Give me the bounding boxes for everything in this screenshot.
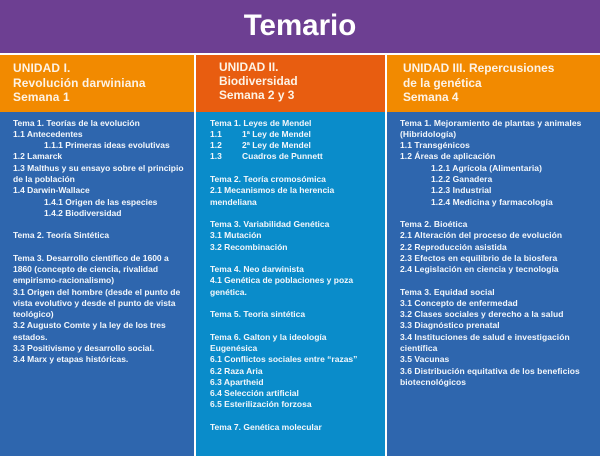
text: unidad II temario: 3.1 Mutación [210, 230, 261, 240]
text: unidad III temario: 1.2.2 Ganadera [431, 174, 492, 184]
text: unidad II temario: Tema 7. Genética molecular [210, 422, 322, 432]
text: unidad II temario: Tema 1. Leyes de Mendel [210, 118, 311, 128]
heading: unidad III [403, 61, 554, 104]
heading: unidad I [13, 61, 146, 104]
text: unidad II temario: 4.1 Genética de poblaciones y poza [210, 275, 353, 285]
text: unidad II temario: 2.1 Mecanismos de la herencia [210, 185, 334, 195]
text: unidad II temario: Tema 2. Teoría cromosómica [210, 174, 326, 184]
text: unidad I temario: 3.1 Origen del hombre (desde el punto de [13, 287, 180, 297]
text: unidad I temario: 3.4 Marx y etapas históricas. [13, 354, 128, 364]
text: unidad III temario: 2.4 Legislación en ciencia y tecnología [400, 264, 559, 274]
heading: unidad I: Semana 1 [13, 90, 70, 104]
text: unidad II temario: mendeliana [210, 197, 257, 207]
text: unidad I temario: empirismo-racionalismo) [13, 275, 114, 285]
text: unidad III temario: 3.5 Vacunas [400, 354, 449, 364]
heading: unidad I: UNIDAD I. [13, 61, 70, 75]
text: unidad III temario: 2.1 Alteración del proceso de evolución [400, 230, 562, 240]
text: unidad I temario: 1.1.1 Primeras ideas evolutivas [44, 140, 170, 150]
text: unidad I temario: Tema 3. Desarrollo científico de 1600 a [13, 253, 169, 263]
text: unidad III temario: 1.2.1 Agrícola (Alimentaria) [431, 163, 542, 173]
text: unidad III temario: Tema 2. Bioética [400, 219, 467, 229]
panel: unidad II header [196, 55, 385, 112]
text: unidad II temario: Tema 6. Galton y la ideología [210, 332, 327, 342]
text: unidad II temario: Eugenésica [210, 343, 257, 353]
text: unidad III temario: 3.1 Concepto de enfermedad [400, 298, 518, 308]
text: unidad III temario: 3.2 Clases sociales y derecho a la salud [400, 309, 564, 319]
heading: unidad III: UNIDAD III. Repercusiones [403, 61, 554, 75]
text: unidad II temario: 6.3 Apartheid [210, 377, 264, 387]
text: unidad III temario: 1.2.4 Medicina y farmacología [431, 197, 553, 207]
heading: unidad II: Semana 2 y 3 [219, 88, 294, 102]
text: unidad II temario: Tema 3. Variabilidad Genética [210, 219, 329, 229]
text: unidad I temario: 3.3 Positivismo y desarrollo social. [13, 343, 154, 353]
panel: unidad III contents [387, 112, 600, 456]
title banner [0, 0, 600, 53]
text: unidad I temario: Tema 2. Teoría Sintética [13, 230, 109, 240]
text: unidad III temario: (Hibridología) [400, 129, 456, 139]
text: unidad I temario: vista evolutivo y desde el punto de vista [13, 298, 176, 308]
text: unidad III temario: 3.6 Distribución equitativa de los beneficios [400, 366, 580, 376]
text: unidad II temario: 1.1 [210, 129, 222, 139]
panel: unidad I contents [0, 112, 194, 456]
text: unidad I temario: 1.4 Darwin-Wallace [13, 185, 90, 195]
text: unidad III temario: biotecnológicos [400, 377, 466, 387]
text: unidad I temario: 1.3 Malthus y su ensayo sobre el principio [13, 163, 184, 173]
text: unidad II temario: 6.2 Raza Aria [210, 366, 263, 376]
text: unidad III temario: 2.2 Reproducción asistida [400, 242, 507, 252]
text: unidad II temario: 6.4 Selección artificial [210, 388, 299, 398]
heading: unidad II: UNIDAD II. [219, 60, 278, 74]
text: unidad II temario: 1.3 [210, 151, 222, 161]
text: unidad II temario: 1ª Ley de Mendel [242, 129, 311, 139]
text: unidad II temario: 2ª Ley de Mendel [242, 140, 311, 150]
text: unidad III temario: Tema 1. Mejoramiento de plantas y animales [400, 118, 581, 128]
text: unidad II temario: Tema 4. Neo darwinista [210, 264, 304, 274]
text: unidad I temario: 1.4.1 Origen de las especies [44, 197, 157, 207]
text: unidad II temario: Tema 5. Teoría sintética [210, 309, 305, 319]
text: unidad III temario: 1.2 Áreas de aplicación [400, 151, 495, 161]
text: unidad II temario: 6.1 Conflictos sociales entre “razas” [210, 354, 357, 364]
text: unidad II temario: genética. [210, 287, 247, 297]
heading: unidad III: Semana 4 [403, 90, 459, 104]
heading: unidad II [219, 60, 298, 102]
text: unidad III temario: 1.2.3 Industrial [431, 185, 491, 195]
text: unidad II temario: 1.2 [210, 140, 222, 150]
text: unidad I temario: de la población [13, 174, 75, 184]
heading: unidad I: Revolución darwiniana [13, 76, 146, 90]
text: unidad I temario: 1.4.2 Biodiversidad [44, 208, 121, 218]
text: unidad II temario [210, 118, 357, 432]
text: unidad II temario: 3.2 Recombinación [210, 242, 287, 252]
text: unidad I temario: 1.1 Antecedentes [13, 129, 83, 139]
panel: unidad III header [387, 55, 600, 112]
text: unidad I temario [13, 118, 184, 364]
text: unidad III temario: Tema 3. Equidad social [400, 287, 495, 297]
title: Temario [244, 9, 356, 42]
text: unidad I temario: estados. [13, 332, 48, 342]
text: unidad I temario: 3.2 Augusto Comte y la ley de los tres [13, 320, 166, 330]
heading: unidad III: de la genética [403, 76, 482, 90]
text: unidad III temario: 2.3 Efectos en equilibrio de la biosfera [400, 253, 557, 263]
heading: unidad II: Biodiversidad [219, 74, 298, 88]
text: unidad I temario: Tema 1. Teorías de la evolución [13, 118, 140, 128]
panel: unidad I header [0, 55, 194, 112]
text: unidad I temario: 1860 (concepto de ciencia, rivalidad [13, 264, 158, 274]
text: unidad III temario: 3.4 Instituciones de salud e investigación [400, 332, 570, 342]
text: unidad III temario: 1.1 Transgénicos [400, 140, 470, 150]
text: unidad II temario: Cuadros de Punnett [242, 151, 323, 161]
text: unidad I temario: 1.2 Lamarck [13, 151, 62, 161]
panel: unidad II contents [196, 112, 385, 456]
text: unidad I temario: teológico) [13, 309, 54, 319]
text: unidad III temario: 3.3 Diagnóstico prenatal [400, 320, 500, 330]
text: unidad III temario: científica [400, 343, 437, 353]
text: unidad II temario: 6.5 Esterilización forzosa [210, 399, 312, 409]
text: unidad III temario [400, 118, 581, 387]
